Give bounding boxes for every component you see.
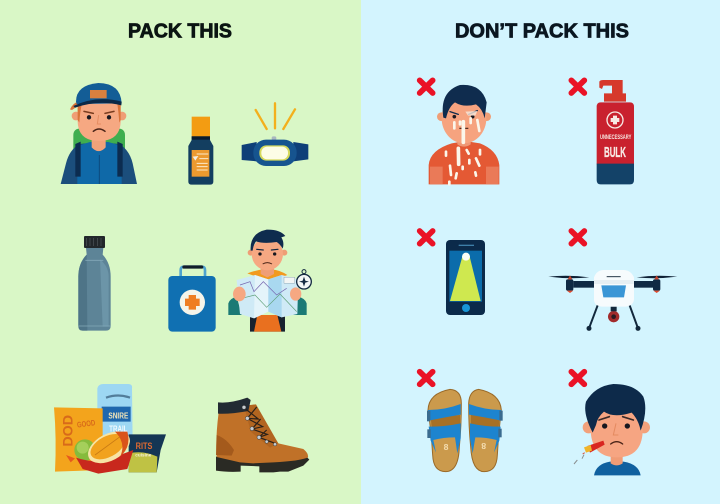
- icon: person reading map with compass: [228, 230, 311, 332]
- icon: essential oil bottle: [188, 117, 213, 185]
- icon: trail snacks: SNIRE: [108, 411, 129, 420]
- icon: sandals: 8: [481, 441, 486, 451]
- icon: lotion pump bottle labelled unnecessary bulk: BULK: [604, 145, 626, 161]
- icon: lotion pump bottle labelled unnecessary bulk: UNNECESSARY: [600, 134, 632, 141]
- icon: water bottle: [78, 236, 111, 331]
- heading: pack this: PACK THIS: [128, 20, 232, 42]
- icon: camera drone: [548, 270, 677, 331]
- icon: person with firecracker in mouth: [574, 384, 650, 475]
- panel: pack this: [0, 0, 361, 504]
- icon: trail snacks: TRAIL: [109, 424, 128, 434]
- panel: don't pack this: [361, 0, 720, 504]
- icon: red cross, bulky lotion: [571, 80, 584, 93]
- icon: hiking boot: [216, 398, 309, 472]
- icon: trail snacks: RITS: [136, 441, 152, 451]
- icon: trail snacks: GOOD: [76, 418, 96, 430]
- icon: trail snacks: [54, 384, 166, 474]
- icon: first aid kit: [168, 267, 216, 332]
- icon: red cross, sandals: [420, 372, 433, 384]
- icon: hiker with backpack: [61, 83, 137, 184]
- icon: red cross, person with firework: [571, 372, 584, 384]
- icon: sandals: 8: [444, 442, 449, 452]
- icon: red cross, sunscreen: [420, 80, 433, 93]
- icon: person covered in sunscreen: [429, 85, 499, 184]
- icon: red cross, drone: [571, 231, 584, 244]
- icon: trail snacks: cuisine: [135, 452, 152, 457]
- icon: headlamp: [242, 103, 308, 166]
- icon: trail snacks: DOD: [59, 415, 75, 447]
- heading: don't pack this: DON’T PACK THIS: [455, 20, 629, 42]
- icon: lotion pump bottle labelled unnecessary bulk: [597, 80, 634, 184]
- icon: sandals: [427, 389, 503, 472]
- icon: phone with flashlight: [446, 240, 485, 315]
- icon: red cross, phone flashlight: [420, 231, 433, 244]
